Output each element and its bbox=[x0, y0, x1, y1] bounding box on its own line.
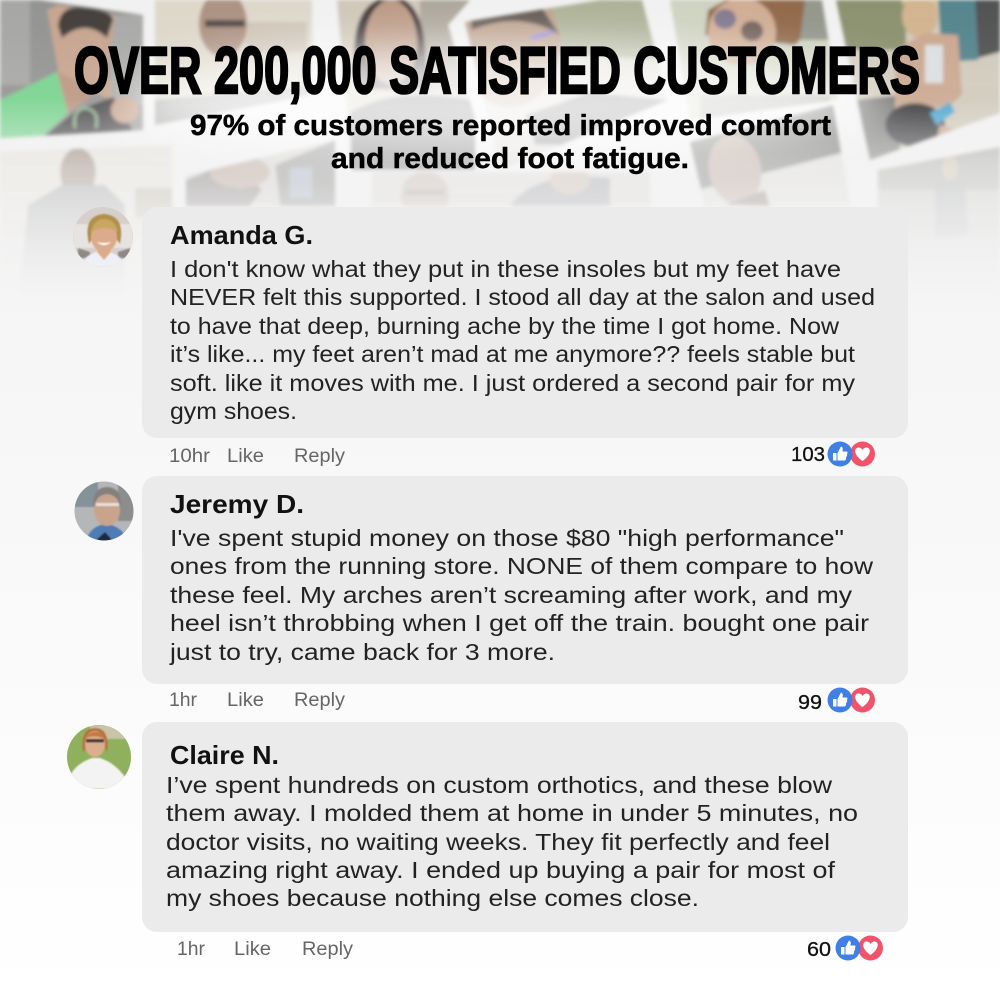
comment text bbox=[170, 256, 875, 424]
photo: standing blonde woman bbox=[877, 146, 1000, 237]
meta links: Reply bbox=[294, 689, 345, 711]
comment text: to have that deep, burning ache by the time I got home. Now bbox=[170, 313, 840, 339]
icon: heart reaction bbox=[850, 688, 875, 712]
meta links bbox=[169, 689, 345, 711]
comment text: NEVER felt this supported. I stood all day at the salon and used bbox=[170, 284, 875, 310]
name: Claire N. bbox=[170, 740, 279, 770]
comment bubble bbox=[142, 207, 908, 438]
comment text bbox=[166, 772, 858, 911]
comment text: I’ve spent hundreds on custom orthotics, and these blow bbox=[166, 772, 833, 798]
comment text: doctor visits, no waiting weeks. They fit perfectly and feel bbox=[166, 829, 830, 855]
comment card: Amanda G. bbox=[73, 207, 908, 467]
comment bubble bbox=[142, 722, 908, 932]
comment text: gym shoes. bbox=[170, 398, 297, 424]
comment text: soft. like it moves with me. I just ordered a second pair for my bbox=[170, 370, 855, 396]
comment card: Jeremy D. bbox=[74, 476, 908, 714]
photo: woman with dark hair bbox=[335, 0, 475, 175]
subtitle bbox=[190, 110, 831, 175]
photo: bearded man bbox=[1, 146, 173, 252]
meta links: Like bbox=[227, 689, 264, 711]
icon: heart reaction bbox=[858, 936, 883, 960]
icon: like reaction bbox=[836, 936, 860, 960]
photo: blonde woman exercising bbox=[836, 0, 1000, 165]
meta links bbox=[169, 445, 345, 467]
comment text: it’s like... my feet aren’t mad at me anymore?? feels stable but bbox=[170, 341, 855, 367]
comment text: just to try, came back for 3 more. bbox=[169, 639, 555, 665]
comment text: amazing right away. I ended up buying a pair for most of bbox=[166, 857, 836, 883]
comment card: Claire N. bbox=[67, 722, 908, 961]
photo: woman with glasses bbox=[670, 0, 840, 125]
icon: like reaction bbox=[828, 688, 852, 712]
photo: man with glasses under trees bbox=[460, 0, 670, 175]
white glow behind title bbox=[125, 45, 875, 155]
comment text: them away. I molded them at home in under 5 minutes, no bbox=[166, 800, 858, 826]
subtitle: 97% of customers reported improved comfort bbox=[190, 110, 831, 142]
meta links: 1hr bbox=[169, 689, 197, 711]
meta links: Reply bbox=[302, 938, 353, 960]
comment bubble bbox=[142, 476, 908, 684]
comment text: my shoes because nothing else comes close. bbox=[166, 885, 699, 911]
meta links: Like bbox=[234, 938, 271, 960]
meta links: 10hr bbox=[169, 445, 211, 467]
comment text: I've spent stupid money on those $80 "high performance" bbox=[170, 525, 844, 551]
avatar: Jeremy bbox=[74, 481, 134, 541]
photo: person lying down bbox=[186, 140, 336, 210]
comment text: heel isn’t throbbing when I get off the train. bought one pair bbox=[170, 610, 869, 636]
meta links bbox=[177, 938, 353, 960]
name: Amanda G. bbox=[170, 220, 313, 250]
meta links: Like bbox=[227, 445, 264, 467]
photo: group lower centre bbox=[373, 171, 649, 206]
comment text: ones from the running store. NONE of them compare to how bbox=[170, 553, 874, 579]
meta links: Reply bbox=[294, 445, 345, 467]
avatar: Amanda bbox=[73, 207, 133, 267]
photo collage background bbox=[0, 0, 1000, 252]
comment text: these feel. My arches aren’t screaming after work, and my bbox=[170, 582, 852, 608]
reaction count: 60 bbox=[807, 939, 831, 961]
comment text: I don't know what they put in these insoles but my feet have bbox=[170, 256, 841, 282]
photo: man in green shirt bbox=[0, 0, 150, 140]
meta links: 1hr bbox=[177, 938, 205, 960]
comment text bbox=[169, 525, 874, 665]
icon: heart reaction bbox=[850, 442, 875, 466]
reaction count: 103 bbox=[791, 444, 825, 466]
subtitle: and reduced foot fatigue. bbox=[331, 143, 689, 175]
avatar: Claire bbox=[67, 725, 131, 789]
reaction count: 99 bbox=[798, 692, 822, 714]
icon: like reaction bbox=[828, 442, 852, 466]
photo: man's face tilted bbox=[690, 105, 850, 210]
photo: bald man bbox=[155, 0, 315, 130]
name: Jeremy D. bbox=[170, 489, 304, 519]
